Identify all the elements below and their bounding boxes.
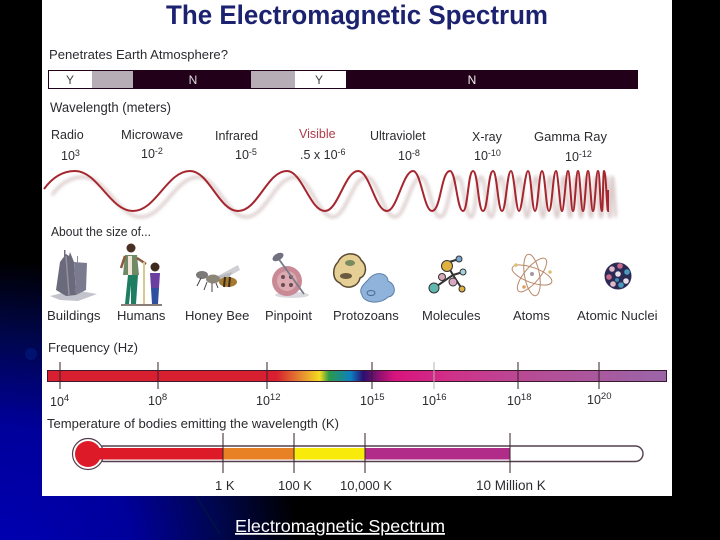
heading: temperature: Temperature of bodies emitting the wavelength (K) <box>47 416 339 431</box>
icon: molecules <box>429 256 466 293</box>
frequency spectrum bar: 20 <box>601 391 611 402</box>
size labels: Humans <box>117 308 166 323</box>
wavelength labels <box>51 127 607 164</box>
wavelength labels: Infrared <box>215 129 258 143</box>
wavelength labels: -5 <box>249 147 257 157</box>
thermometer: 100 K <box>278 478 312 493</box>
icon: protozoans <box>334 254 394 302</box>
atmosphere penetration bar <box>48 70 638 89</box>
icon: atoms <box>510 253 554 297</box>
wavelength labels: 10 <box>398 149 412 163</box>
size labels: Molecules <box>422 308 481 323</box>
wavelength labels: 10 <box>61 149 75 163</box>
thermometer <box>72 433 643 493</box>
frequency spectrum bar: 15 <box>374 392 384 403</box>
wavelength labels: X-ray <box>472 130 503 144</box>
atmosphere penetration bar: Y <box>315 73 323 87</box>
wavelength labels: Visible <box>299 127 336 141</box>
frequency spectrum bar: 10 <box>507 394 521 408</box>
wavelength labels: Gamma Ray <box>534 129 607 144</box>
thermometer: 10,000 K <box>340 478 392 493</box>
thermometer: 10 Million K <box>476 478 546 493</box>
size labels: Pinpoint <box>265 308 312 323</box>
wave shadow <box>52 177 616 217</box>
size labels: Honey Bee <box>185 308 249 323</box>
size labels: Atomic Nuclei <box>577 308 658 323</box>
wavelength labels: 3 <box>75 148 80 158</box>
size labels: Buildings <box>47 308 101 323</box>
wavelength labels: Ultraviolet <box>370 129 426 143</box>
frequency spectrum bar: 18 <box>521 392 531 403</box>
frequency spectrum bar: 10 <box>360 394 374 408</box>
wavelength labels: -10 <box>488 148 501 158</box>
heading: atmosphere penetration: Penetrates Earth Atmosphere? <box>49 47 228 62</box>
icon: honey bee <box>196 265 240 292</box>
icon: pinpoint <box>271 251 309 298</box>
heading: frequency: Frequency (Hz) <box>48 340 138 355</box>
frequency spectrum bar: 16 <box>436 392 446 403</box>
wavelength labels: -2 <box>155 146 163 156</box>
icon: buildings <box>50 250 97 301</box>
frequency spectrum bar: 10 <box>148 394 162 408</box>
frequency spectrum bar: 10 <box>587 393 601 407</box>
atmosphere penetration bar: N <box>468 73 476 87</box>
icon: atomic nuclei <box>604 262 632 290</box>
wavelength labels: 10 <box>565 150 579 164</box>
icon: humans <box>121 244 162 306</box>
frequency spectrum bar: 12 <box>270 392 280 403</box>
thermometer: 1 K <box>215 478 235 493</box>
wavelength labels: .5 x 10 <box>300 148 338 162</box>
size labels <box>47 308 658 323</box>
frequency spectrum bar: 4 <box>64 393 69 404</box>
wavelength labels: -6 <box>338 147 346 157</box>
frequency spectrum bar: 10 <box>256 394 270 408</box>
frequency spectrum bar: 10 <box>50 395 64 409</box>
heading: wavelength: Wavelength (meters) <box>50 100 171 115</box>
title: The Electromagnetic Spectrum <box>166 0 548 30</box>
wavelength labels: -12 <box>579 149 592 159</box>
wavelength labels: 10 <box>141 147 155 161</box>
caption: Electromagnetic Spectrum <box>235 516 445 536</box>
wavelength labels: Radio <box>51 128 84 142</box>
wave chart <box>44 171 616 217</box>
wavelength labels: 10 <box>235 148 249 162</box>
wave line <box>44 171 608 211</box>
size labels: Atoms <box>513 308 550 323</box>
wavelength labels: Microwave <box>121 127 183 142</box>
heading: size comparison: About the size of... <box>51 225 151 239</box>
wavelength labels: -8 <box>412 148 420 158</box>
size labels: Protozoans <box>333 308 399 323</box>
frequency spectrum bar: 8 <box>162 392 167 403</box>
atmosphere penetration bar: Y <box>66 73 74 87</box>
atmosphere penetration bar: N <box>189 73 197 87</box>
frequency spectrum bar <box>48 362 666 409</box>
frequency spectrum bar: 10 <box>422 394 436 408</box>
wavelength labels: 10 <box>474 149 488 163</box>
